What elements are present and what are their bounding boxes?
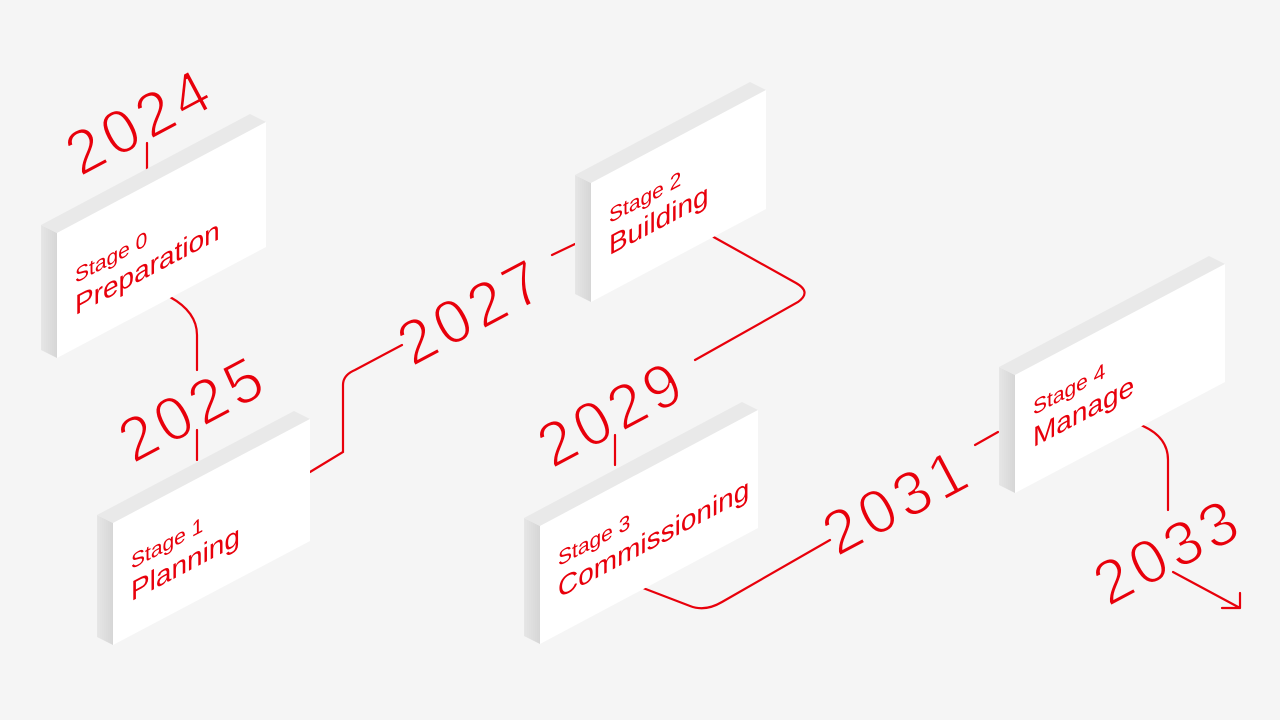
box: stage 1: Stage 1 <box>131 512 203 574</box>
box: stage 0: Stage 0 <box>75 226 147 288</box>
year: 2029: 2029 <box>526 346 698 481</box>
box: stage 2: Building <box>609 178 709 262</box>
box: stage 3: Commissioning <box>558 473 749 605</box>
year: 2024: 2024 <box>54 54 226 189</box>
box: stage 4: Stage 4 <box>1033 358 1105 420</box>
year: 2031: 2031 <box>811 434 983 569</box>
box: stage 2: Stage 2 <box>609 166 681 228</box>
box: stage 4: Manage <box>1033 369 1134 454</box>
year: 2027: 2027 <box>386 244 558 379</box>
year: 2025: 2025 <box>107 341 279 476</box>
connector lines <box>147 143 1240 608</box>
box: stage 4 <box>999 256 1225 493</box>
year: 2033: 2033 <box>1082 484 1254 619</box>
box: stage 3: Stage 3 <box>558 509 630 571</box>
box: stage 1 <box>97 411 310 645</box>
box: stage 1: Planning <box>131 519 240 608</box>
box: stage 0 <box>41 114 266 358</box>
box: stage 0: Preparation <box>75 214 220 322</box>
box: stage 2 <box>575 82 766 302</box>
box: stage 3 <box>524 402 758 644</box>
